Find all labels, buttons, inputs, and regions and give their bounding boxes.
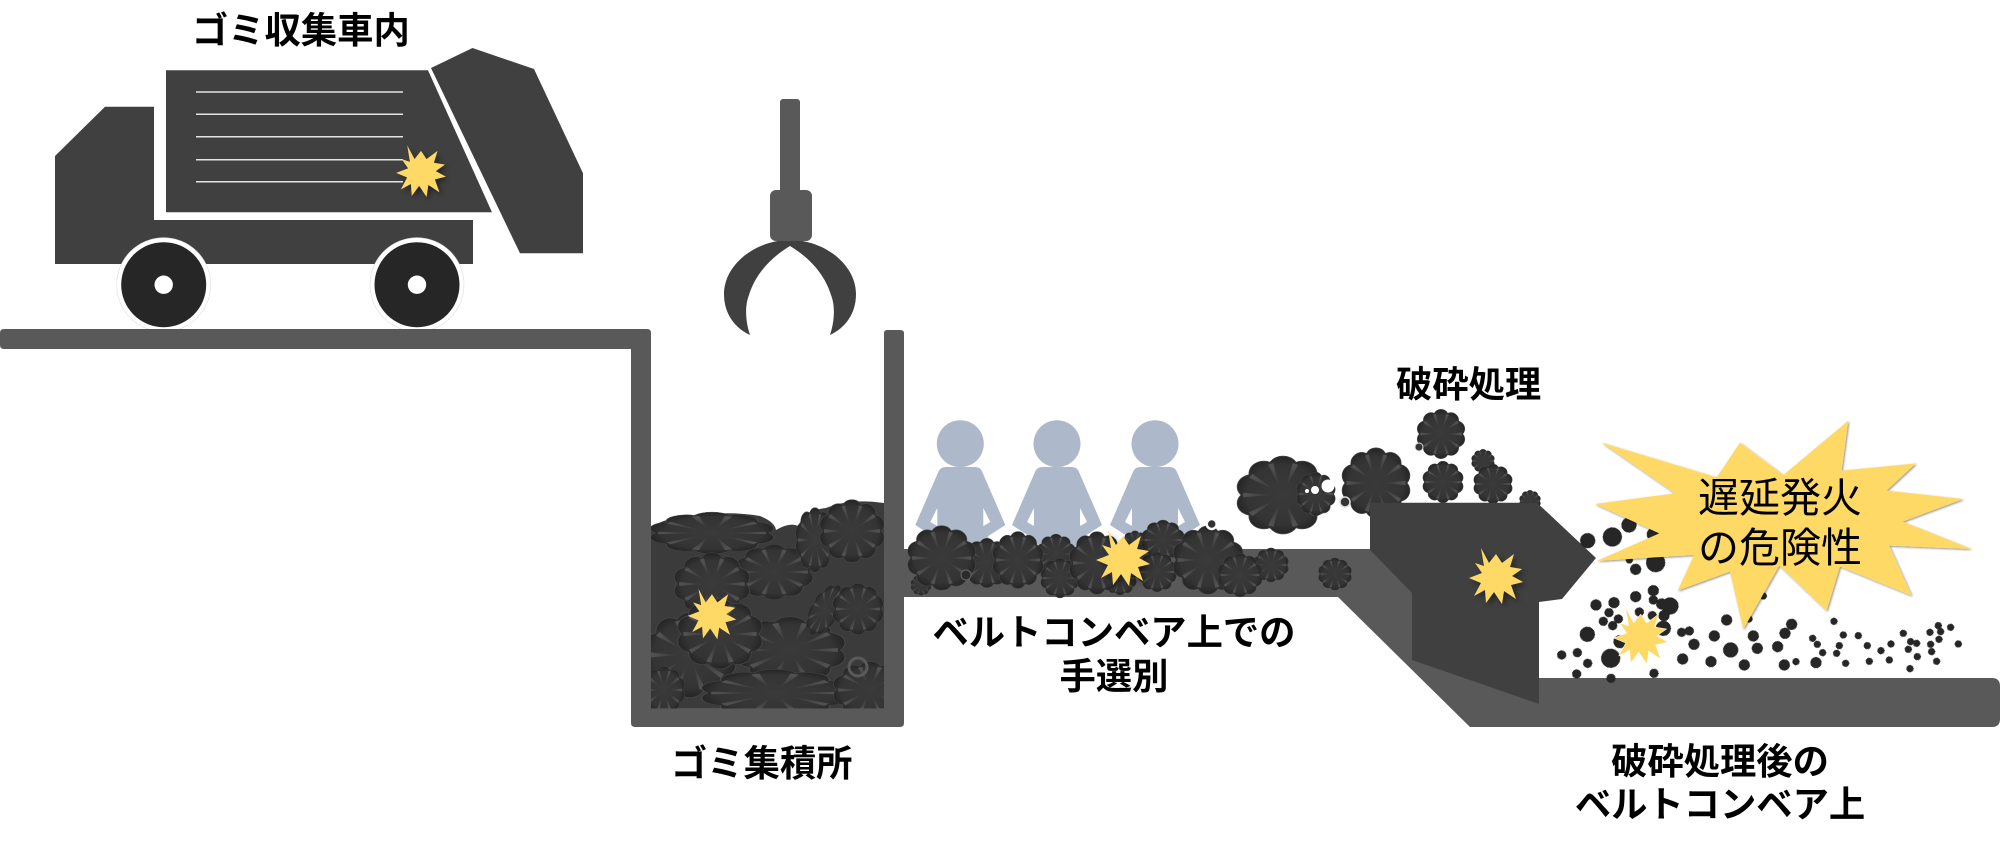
icon: fire spark in truck — [396, 145, 446, 197]
worker 2 — [1012, 420, 1102, 549]
label: on conveyor after crushing: 破砕処理後の — [1611, 741, 1829, 782]
crane head — [770, 190, 812, 241]
cargo lines — [196, 92, 403, 182]
road and waste pit walls — [0, 329, 904, 727]
label: crushing: 破砕処理 — [1396, 364, 1541, 405]
truck cab and chassis — [55, 107, 473, 264]
label: on conveyor after crushing: ベルトコンベア上 — [1575, 784, 1865, 825]
truck cargo box — [166, 70, 492, 212]
callout text: risk of delayed ignition: 遅延発火 — [1698, 475, 1862, 521]
worker 3 — [1110, 420, 1200, 549]
garbage truck — [55, 48, 583, 332]
crusher machine — [1370, 503, 1596, 704]
icon: fire spark on conveyor — [1096, 530, 1150, 586]
label: hand sorting on conveyor: 手選別 — [1060, 656, 1168, 697]
garbage pile in pit — [651, 499, 884, 709]
icon: fire spark on lower conveyor — [1614, 608, 1668, 664]
garbage falling into crusher — [1237, 409, 1541, 534]
label: hand sorting on conveyor: ベルトコンベア上での — [933, 612, 1295, 653]
worker 1 — [915, 420, 1005, 549]
crane claw — [724, 240, 856, 335]
label: waste pit: ゴミ集積所 — [671, 743, 852, 784]
conveyor belts and chute — [904, 549, 2000, 727]
title: inside garbage truck: ゴミ収集車内 — [192, 10, 410, 51]
icon: fire spark in crusher — [1469, 548, 1523, 604]
callout text: risk of delayed ignition: の危険性 — [1698, 525, 1862, 571]
front wheel — [117, 238, 211, 332]
crushed debris — [1557, 518, 1962, 683]
callout burst — [1595, 421, 1972, 629]
workers — [915, 420, 1200, 549]
crane arm — [780, 99, 800, 194]
rear wheel — [370, 238, 464, 332]
truck rear door — [431, 48, 583, 253]
icon: fire spark in pit — [688, 589, 736, 639]
garbage on sorting conveyor — [908, 519, 1352, 598]
